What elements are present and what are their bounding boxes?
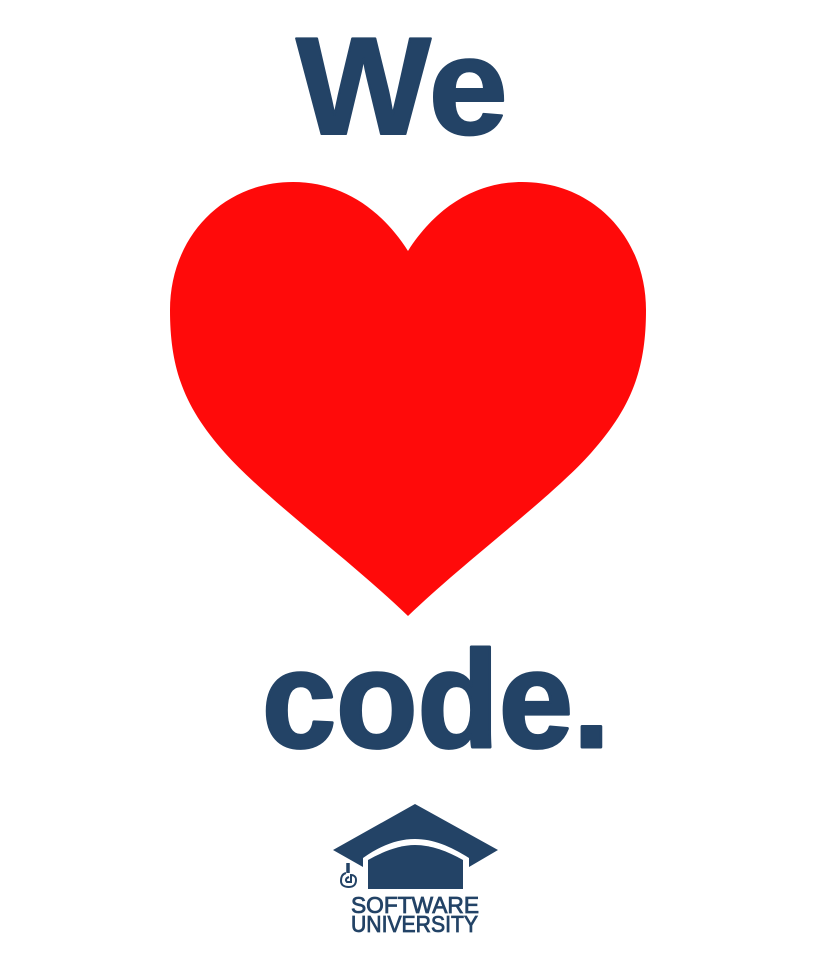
heading: We: We bbox=[296, 9, 508, 164]
logo text: SOFTWARE: SOFTWARE bbox=[351, 892, 479, 918]
logo text: UNIVERSITY: UNIVERSITY bbox=[351, 911, 478, 937]
logo: Software University bbox=[333, 804, 498, 937]
icon: tassel bbox=[341, 863, 356, 887]
icon: graduation cap bbox=[333, 804, 498, 889]
heading: code.: code. bbox=[262, 623, 610, 777]
icon: red heart bbox=[170, 182, 646, 616]
